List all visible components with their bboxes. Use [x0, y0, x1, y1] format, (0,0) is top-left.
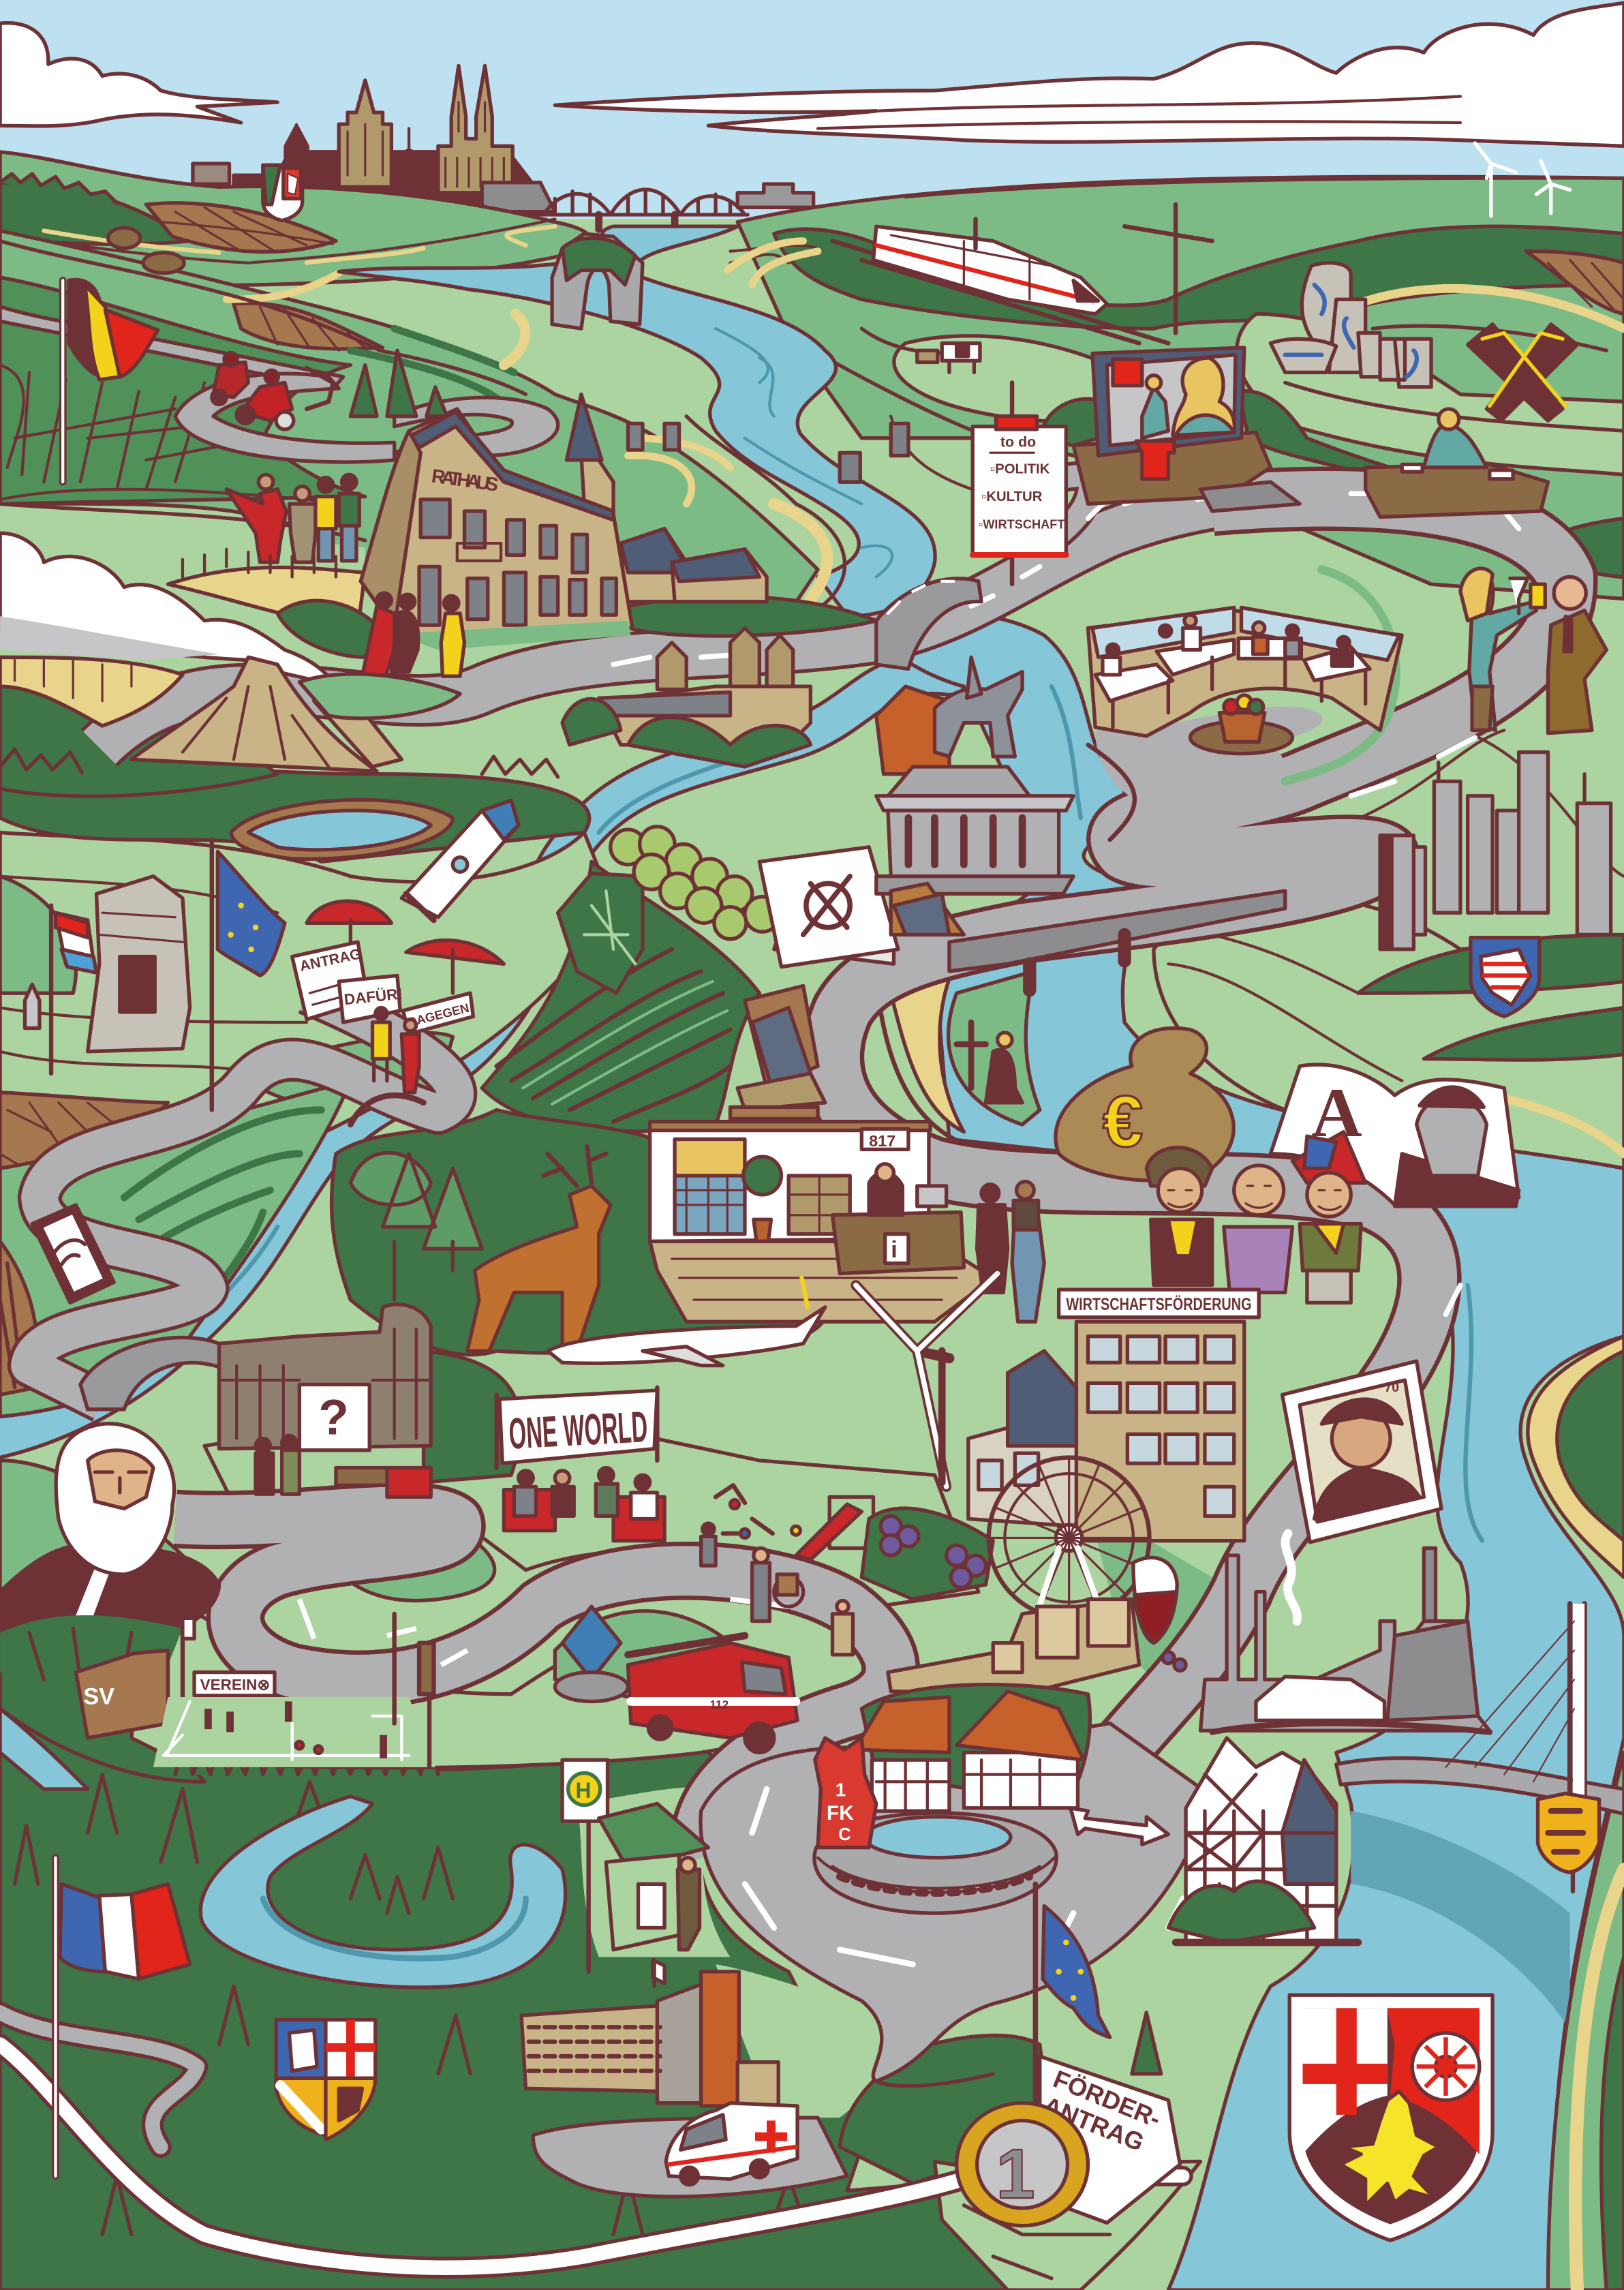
high-speed train — [833, 226, 1168, 344]
stone bridge north — [876, 579, 981, 669]
deer — [468, 1146, 611, 1351]
train overhead masts — [976, 204, 1212, 333]
west lower meadow — [0, 1461, 788, 1789]
Ferris wheel — [989, 1458, 1149, 1636]
river upper meander — [339, 226, 935, 625]
half-timbered town house — [1168, 1738, 1358, 1942]
ballot paper — [759, 847, 898, 967]
flower pot — [1190, 695, 1292, 754]
crucifix and saint — [957, 1022, 1022, 1103]
people at Porta Nigra — [256, 1435, 431, 1497]
right top fields — [727, 177, 1624, 599]
one euro coin — [957, 2103, 1088, 2226]
Porta Nigra: ? — [318, 1390, 349, 1445]
information desk: i — [891, 1237, 898, 1263]
economic development building — [968, 1322, 1244, 1541]
bus shelter — [599, 1803, 708, 1950]
stone bridge west — [80, 1095, 423, 1409]
SV club hut: SV — [83, 1684, 114, 1710]
crater lake — [231, 800, 453, 859]
Baden-Wuerttemberg coat of arms — [1537, 1793, 1599, 1872]
sign: Dafür: DAFÜR! — [343, 985, 403, 1008]
rubble books and ruins in vineyard — [737, 986, 825, 1110]
Wirtschaftsförderung sign — [1059, 1289, 1259, 1317]
flag: France — [56, 1858, 190, 2176]
ambulance — [666, 2103, 797, 2185]
playground — [716, 1485, 874, 1560]
stage with video screen — [1073, 348, 1300, 511]
money bag — [1056, 1028, 1234, 1180]
Rhine bridge Cologne — [540, 189, 748, 229]
funding application paper: ANTRAG — [1039, 2091, 1148, 2156]
vineyard and central forest — [332, 861, 827, 1355]
serpentine road behind Rathaus — [0, 307, 558, 462]
Deutsches Eck monument — [876, 657, 1073, 934]
roundabout south — [701, 1724, 1212, 2086]
SV club hut — [76, 1618, 194, 1738]
trees near Rathaus — [350, 350, 447, 416]
road markings — [613, 493, 1519, 1446]
forest patch near Rathaus — [277, 596, 876, 657]
FCK devil mascot: 1 — [836, 1780, 846, 1801]
open book — [1270, 1065, 1519, 1206]
road east and central — [832, 499, 1565, 1797]
smartphone — [32, 1205, 114, 1302]
volcano — [132, 657, 401, 771]
NRW coat of arms — [263, 165, 303, 221]
information desk — [833, 1164, 964, 1274]
central hills near porta — [204, 1351, 1285, 1694]
to-do board: to do — [1000, 434, 1036, 451]
mining hammers — [1468, 324, 1577, 421]
memorial stone — [88, 876, 190, 1052]
flag: Luxembourg — [51, 906, 97, 1073]
Marx portrait — [0, 1424, 219, 1636]
direction arrow — [1071, 1808, 1168, 1844]
volcano smoke — [0, 533, 336, 686]
road south-west winding — [175, 1512, 891, 1858]
street lamps and posts — [395, 1614, 433, 1767]
bushes around stage — [1040, 391, 1439, 482]
wild boars — [108, 228, 184, 273]
One World banner — [497, 1388, 657, 1468]
FCK devil mascot — [815, 1738, 876, 1848]
right meadow — [876, 730, 1624, 1168]
clouds left — [0, 23, 277, 126]
council terrace — [1088, 607, 1402, 736]
trees below Marx — [0, 1615, 183, 1679]
one euro coin: 1 — [996, 2135, 1035, 2213]
Luther stamp: 70 — [1384, 1381, 1399, 1395]
group on sofas — [504, 1468, 664, 1541]
Rathaus lettering: RATHAUS — [430, 465, 500, 495]
oxbow river — [200, 1797, 566, 1987]
people with wheelchair — [701, 1523, 853, 1655]
football pitch — [153, 1697, 435, 1767]
FCK devil mascot: C — [838, 1825, 851, 1844]
sign: Dagegen: DAGEGEN — [406, 1001, 470, 1029]
half-timbered houses — [855, 1691, 1084, 1811]
bridge south Rhine — [1336, 1604, 1624, 1891]
funding application paper: FÖRDER- — [1050, 2064, 1165, 2133]
Luther stamp — [1283, 1361, 1441, 1542]
green island near volcano — [299, 674, 460, 718]
refinery industry — [1201, 1533, 1490, 1732]
Saarland coat of arms — [276, 2020, 376, 2139]
bus stop sign — [562, 1760, 608, 1972]
forest by coin — [840, 2013, 1201, 2290]
vine leaves — [861, 1508, 993, 1599]
grape vine leaf — [558, 873, 643, 993]
ruin with ivy — [552, 234, 643, 329]
green hill below castle — [861, 1685, 1090, 1803]
club sign — [194, 1673, 275, 1696]
hospital — [521, 1960, 778, 2106]
stone towers and chimneys — [628, 423, 908, 482]
road bridge over Rhine — [949, 891, 1285, 990]
Koblenz water and Rhine — [869, 613, 1624, 2290]
Wirtschaftsförderung sign: WIRTSCHAFTSFÖRDERUNG — [1066, 1296, 1251, 1314]
south-west forest — [0, 1592, 1022, 2290]
to-do board: ▫KULTUR — [981, 489, 1043, 504]
open book: A — [1311, 1074, 1362, 1152]
stoneware jugs — [1270, 263, 1431, 387]
airplane — [548, 1278, 825, 1366]
wine glass — [1133, 1557, 1177, 1643]
protest group with parasols and signs — [292, 901, 504, 1093]
tourists — [977, 1182, 1044, 1322]
tourist office: 817 — [869, 1132, 895, 1150]
road loop around council terrace — [1088, 570, 1396, 840]
skyscrapers — [1380, 752, 1611, 949]
river bank sand upper — [504, 314, 993, 613]
sign: Antrag — [292, 942, 368, 1020]
mid left slope fields — [0, 231, 818, 622]
white path and grey track — [0, 2013, 1183, 2268]
bus stop sign: H — [575, 1778, 592, 1803]
milestone — [25, 984, 40, 1028]
funding application paper — [1039, 2056, 1180, 2223]
Cologne skyline — [193, 65, 555, 216]
meadow grass and wheat — [168, 549, 365, 628]
distant right fields and city — [737, 184, 814, 207]
club sign: VEREIN⊗ — [200, 1676, 270, 1693]
wind turbines top — [1475, 143, 1570, 216]
to-do board: ▫POLITIK — [990, 461, 1050, 476]
cows — [917, 344, 980, 372]
toasting couple — [1460, 568, 1606, 733]
sign: Dafür — [339, 975, 403, 1022]
left middle land — [0, 665, 613, 1197]
flag: European Union west — [212, 840, 285, 1110]
to-do board: ▫WIRTSCHAFT — [979, 518, 1065, 532]
road to hospital — [533, 2118, 847, 2197]
three silhouettes — [363, 593, 465, 676]
right island forest — [1528, 1337, 1624, 1577]
side houses — [621, 529, 767, 602]
Moselle river — [0, 673, 949, 1439]
flag: Belgium — [63, 279, 157, 482]
grapes and wine — [880, 1516, 1186, 1670]
grapes — [611, 827, 780, 939]
sand field left — [0, 657, 183, 726]
motorcycles — [212, 353, 294, 429]
tourist office — [650, 1107, 993, 1322]
water bottle rocket — [401, 800, 519, 920]
Rathaus building — [361, 395, 632, 650]
road north — [99, 474, 1482, 748]
right bank strip — [1548, 1752, 1624, 2290]
fountain plaza — [814, 1813, 1056, 1913]
One World banner: ONE WORLD — [508, 1402, 649, 1459]
fire truck: 112 — [709, 1698, 729, 1711]
castle — [888, 1599, 1139, 1694]
flag: European Union south — [1035, 1884, 1110, 2103]
Rhineland-Palatinate coat of arms — [1289, 1995, 1492, 2240]
clouds right — [555, 3, 1624, 146]
far hills left — [0, 152, 590, 286]
three carnival figures — [1146, 1132, 1366, 1302]
news desk presenter — [1366, 409, 1548, 517]
FCK devil mascot: FK — [827, 1802, 854, 1825]
to-do board — [972, 382, 1066, 584]
diamond monument — [555, 1606, 628, 1701]
hikers group — [226, 474, 359, 562]
sign: Dagegen — [403, 993, 473, 1034]
fire truck — [628, 1636, 797, 1752]
money bag: € — [1103, 1080, 1144, 1162]
wind turbine central — [856, 1274, 998, 1486]
sign: Antrag: ANTRAG — [298, 945, 363, 975]
terraces west — [0, 1081, 350, 1417]
abbey — [562, 628, 810, 767]
Hesse coat of arms — [1471, 938, 1539, 1016]
road west — [29, 993, 455, 1402]
Porta Nigra — [219, 1304, 431, 1450]
sky — [0, 0, 1624, 219]
